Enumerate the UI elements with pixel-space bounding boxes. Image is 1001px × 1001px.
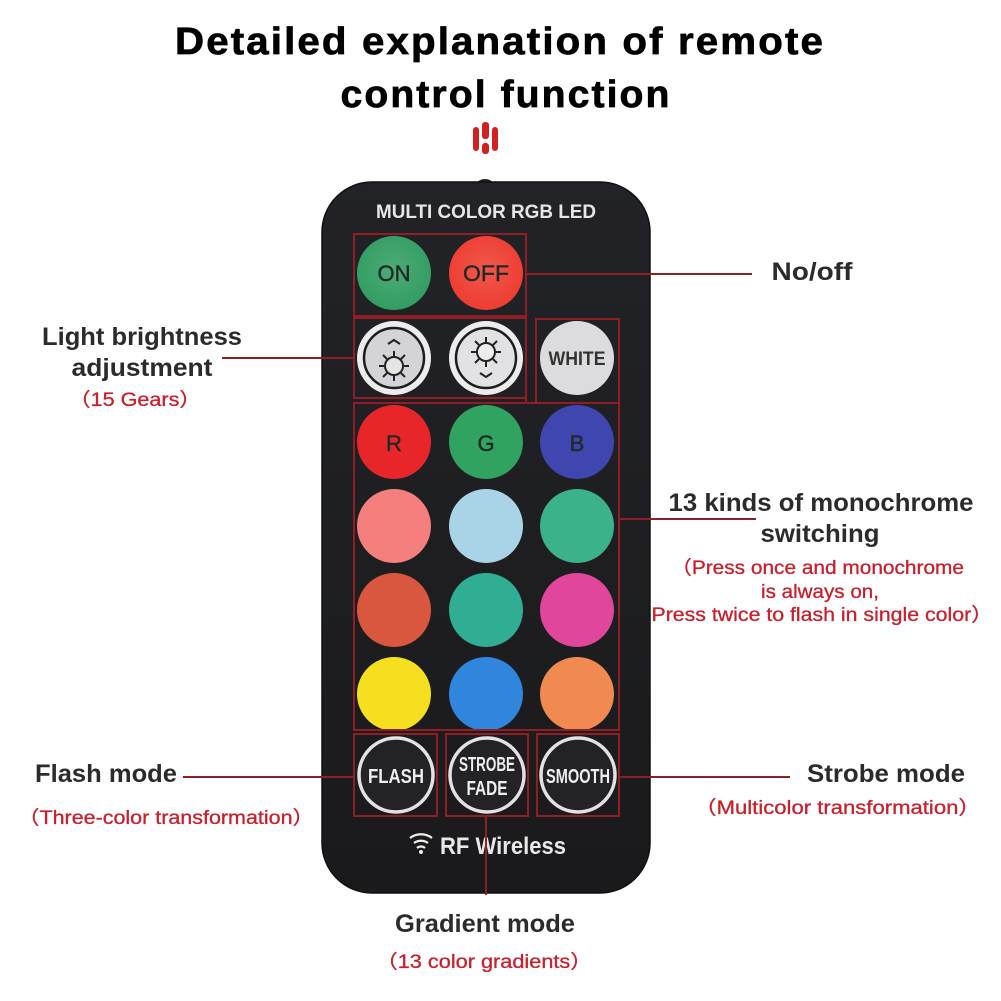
label: monochrome switching: （Press once and monochrome [671,557,964,579]
button: red: R [386,431,402,456]
label: monochrome switching: switching [760,520,880,548]
colour row 4 [357,657,614,731]
button: blue: B [570,431,584,456]
label: gradient mode: Gradient mode [395,910,575,938]
label: monochrome switching: Press twice to flash in single color） [652,604,992,626]
button: on: ON [378,261,410,286]
button: green: G [477,431,495,456]
label: monochrome switching [652,489,992,626]
label: brightness: Light brightness [42,323,242,351]
label: strobe mode: （Multicolor transformation） [694,797,980,819]
icon: exclamation marks [473,122,498,154]
button: brightness down [449,321,523,395]
label: brightness: （15 Gears） [69,389,201,411]
button: flash: FLASH [368,766,424,788]
RF wireless label: RF Wireless [440,833,566,860]
label: no/off: No/off [772,258,853,286]
label: strobe mode: Strobe mode [807,760,965,788]
button: blue [540,405,614,479]
label: monochrome switching: 13 kinds of monochrome [668,489,974,517]
label: strobe mode [694,760,980,819]
label: monochrome switching: is always on, [761,582,879,603]
annotation boxes and leader lines [183,234,790,895]
button: on [357,236,431,310]
remote control body [322,179,650,893]
button: strobe fade: STROBE [459,754,515,776]
button: brightness up [357,321,431,395]
colour row 2 [357,489,614,563]
title [175,21,825,116]
button: off: OFF [463,261,509,286]
button: flash [359,738,433,812]
label: brightness: adjustment [72,354,213,382]
label: gradient mode [376,910,592,973]
remote heading: MULTI COLOR RGB LED [376,202,596,223]
title: control function [340,74,672,116]
button: strobe fade [450,738,524,812]
colour row 3 [357,573,614,647]
button: smooth [541,738,615,812]
label: brightness [42,323,242,411]
button: off [449,236,523,310]
button: white: WHITE [548,349,606,370]
button: strobe fade: FADE [466,778,508,800]
button: red [357,405,431,479]
button: smooth: SMOOTH [546,766,610,788]
label: gradient mode: （13 color gradients） [376,951,592,973]
icon: wifi [410,834,432,854]
label: flash mode: Flash mode [35,760,177,788]
label: flash mode [18,760,314,829]
title: Detailed explanation of remote [175,21,825,63]
colour buttons grid [357,405,614,731]
button: green [449,405,523,479]
button: white [540,321,614,395]
label: flash mode: （Three-color transformation） [18,807,314,829]
